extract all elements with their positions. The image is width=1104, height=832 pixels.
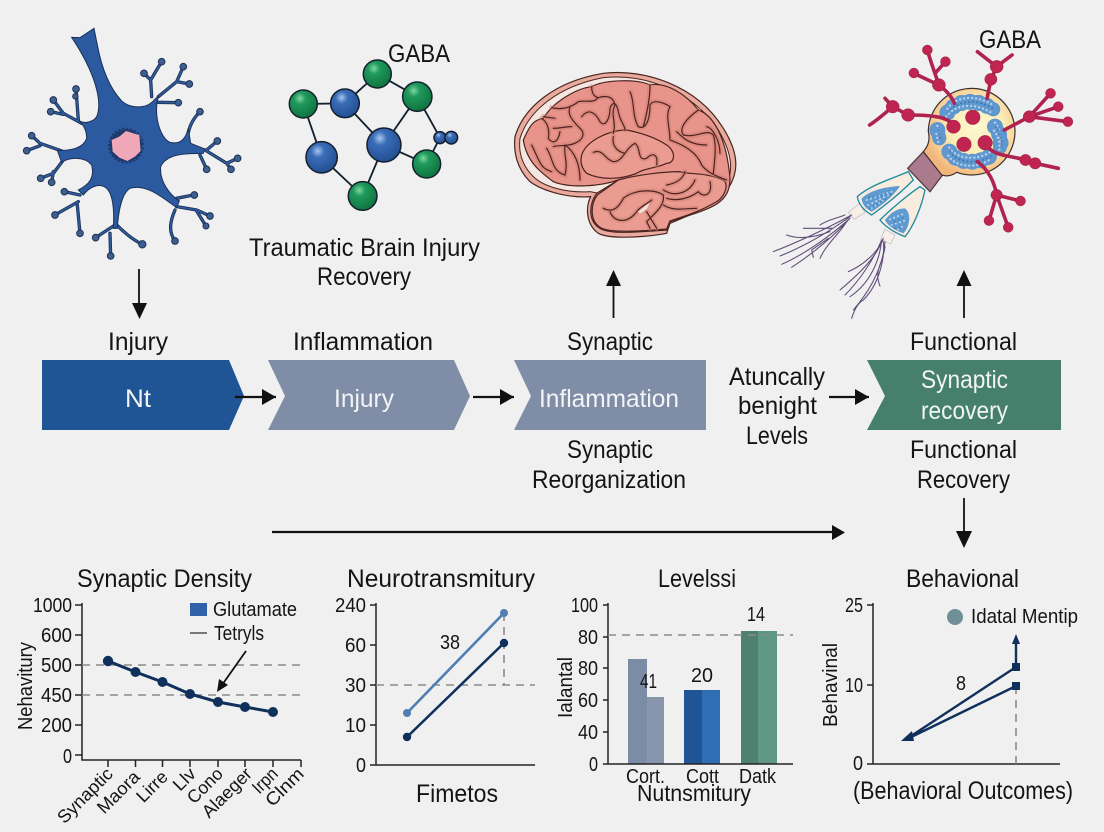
line series [103, 656, 278, 717]
chart title: Neurotransmitury [347, 565, 535, 593]
icon: GABA molecule network [289, 60, 458, 210]
axon fibres and capsules [773, 172, 925, 318]
arrow: down to behavioral [956, 498, 972, 548]
y axis labels: 10 [345, 715, 366, 737]
bar group blue [684, 690, 720, 764]
icon: synapse recovering neuron [773, 45, 1073, 318]
bar group gray [628, 659, 664, 764]
bar group green [741, 631, 777, 764]
legend [190, 599, 297, 645]
molecule bonds [303, 74, 440, 196]
y axis labels: 60 [345, 635, 366, 657]
chart title: Levelssi [658, 565, 736, 593]
cell body [923, 88, 1015, 176]
x axis title: Fimetos [416, 780, 498, 808]
vesicle clusters [936, 98, 1002, 166]
y axis labels: 0 [853, 753, 863, 775]
y axis labels: 40 [578, 722, 598, 744]
stems [848, 203, 895, 244]
red knobs [886, 45, 1073, 232]
capsule vesicle texture [867, 191, 907, 229]
icon: injured neuron [23, 28, 241, 259]
y axis labels: 0 [589, 754, 598, 776]
y axis title: Behavinal [820, 643, 842, 727]
arrow: stage 1 to 2 [235, 389, 276, 405]
stage: Injury: Nt [125, 385, 151, 413]
fibres [773, 215, 885, 318]
stage: Functional: recovery [921, 397, 1008, 425]
y axis labels: 80 [578, 627, 598, 649]
y axis labels: 25 [845, 595, 863, 617]
y axis labels [33, 595, 72, 768]
x axis labels: Synaptic [53, 764, 117, 827]
stage: Inflammation: Injury [334, 385, 394, 413]
x axis labels: Cono [183, 764, 227, 808]
x axis title: (Behavioral Outcomes) [853, 777, 1073, 805]
value labels [640, 604, 765, 693]
axes [370, 603, 535, 765]
chart: Neurotransmitury [335, 565, 535, 808]
y axis labels: 500 [41, 655, 72, 677]
y axis labels: 100 [571, 595, 598, 617]
neuron dendrites [27, 62, 238, 256]
stage: Inflammation: Inflammation [293, 328, 433, 356]
process flow [42, 328, 1061, 494]
stage: Injury [42, 328, 244, 430]
legend: Tetryls [214, 623, 264, 645]
axes [75, 603, 301, 767]
molecule atoms [289, 60, 458, 210]
stage: Functional: Functional [910, 436, 1017, 464]
x axis title: Nutnsmitury [637, 780, 751, 806]
x axis labels: Maora [93, 766, 145, 818]
axes [867, 603, 1060, 764]
y axis labels: 240 [335, 595, 366, 617]
stage: Injury: Injury [108, 328, 168, 356]
text: Atuncally benight Levels: Atuncally [729, 363, 825, 391]
neuron soma and axon [57, 28, 205, 228]
heading: Traumatic Brain Injury Recovery: Traumatic Brain Injury [249, 234, 480, 262]
x axis labels: Clnm [261, 764, 308, 810]
neck [908, 152, 943, 192]
stage: Synaptic: Synaptic [567, 436, 653, 464]
brain fold lines [532, 85, 727, 228]
series light [403, 609, 508, 717]
value labels: 20 [691, 665, 713, 687]
stage: Synaptic: Reorganization [532, 466, 686, 494]
value labels: 14 [747, 604, 765, 626]
label: GABA left: GABA [388, 40, 450, 68]
nucleus [108, 128, 144, 164]
y axis labels: 0 [63, 746, 72, 768]
capsule two [880, 187, 925, 237]
chart title: Behavional [906, 565, 1019, 593]
text: Atuncally benight Levels: benight [738, 392, 817, 420]
chart: Synaptic Density [15, 565, 308, 827]
icon: arrow up to brain [606, 270, 621, 318]
y axis labels [571, 595, 598, 776]
category labels: Datk [739, 766, 777, 788]
brain middle lobe [581, 130, 674, 178]
callout arrow [217, 651, 246, 692]
brain membrane gap [520, 77, 731, 212]
x axis labels: Alaeger [198, 764, 256, 822]
icon: brain [515, 72, 736, 237]
series dark [403, 639, 508, 741]
icon: arrow from neuron to injury [132, 269, 147, 319]
value label: 8 [956, 673, 966, 695]
stage: Inflammation [268, 328, 470, 430]
red dendrites [870, 45, 1073, 232]
legend: Idatal Mentip [971, 606, 1078, 628]
stage: Synaptic: Synaptic [567, 328, 653, 356]
text: Atuncally benight Levels [729, 363, 825, 450]
heading: Traumatic Brain Injury Recovery [249, 234, 480, 291]
y axis labels: 1000 [33, 595, 72, 617]
soma [908, 88, 1015, 192]
y axis title: Ialantal [555, 657, 577, 718]
y axis labels: 0 [356, 755, 366, 777]
heading: Traumatic Brain Injury Recovery: Recovery [317, 263, 411, 291]
y axis labels: 10 [845, 675, 863, 697]
x axis labels: Irpn [248, 764, 282, 798]
dendrite knobs [23, 58, 241, 259]
text: Atuncally benight Levels: Levels [746, 422, 808, 450]
brain temporal boundary [592, 172, 726, 231]
arrow: stage 2 to 3 [473, 389, 514, 405]
label: GABA right: GABA [979, 26, 1041, 54]
icon: arrow up to synapse [956, 270, 972, 318]
brain outer membrane [515, 72, 736, 237]
category labels [626, 766, 777, 788]
y axis labels: 30 [345, 675, 366, 697]
arrow: stage 3 to 4 [829, 389, 869, 405]
stage: Functional: Functional [910, 328, 1017, 356]
stage: Functional: Recovery [917, 466, 1010, 494]
stage: Synaptic [514, 328, 706, 494]
brain sulcus highlight [638, 202, 650, 213]
y axis labels: 600 [41, 625, 72, 647]
value labels: 41 [640, 671, 657, 693]
trend lines [901, 634, 1020, 741]
y axis labels [335, 595, 366, 777]
y axis labels: 450 [41, 685, 72, 707]
arrow: long horizontal [272, 525, 845, 540]
y axis labels: 60 [578, 690, 598, 712]
chart title: Synaptic Density [77, 565, 252, 593]
stage: Synaptic: Inflammation [539, 385, 679, 413]
x axis labels: Llv [169, 764, 200, 795]
chart: Behavional [820, 565, 1078, 805]
category labels: Cort. [626, 766, 665, 788]
y axis labels: 80 [578, 658, 598, 680]
x axis labels [53, 764, 308, 827]
brain folds shading [532, 85, 727, 228]
stage: Functional [867, 328, 1061, 494]
axes [603, 603, 793, 764]
y axis labels: 200 [41, 715, 72, 737]
category labels: Cott [686, 766, 719, 788]
legend: Glutamate [213, 599, 297, 621]
capsule one [857, 172, 913, 215]
y axis labels [845, 595, 863, 775]
brain gyri mass [523, 81, 730, 232]
x axis labels: Lirre [132, 767, 172, 806]
y axis title: Nehavitury [15, 642, 37, 730]
stage: Functional: Synaptic [921, 366, 1008, 394]
chart: Levelssi [555, 565, 793, 806]
value label: 38 [440, 632, 460, 654]
